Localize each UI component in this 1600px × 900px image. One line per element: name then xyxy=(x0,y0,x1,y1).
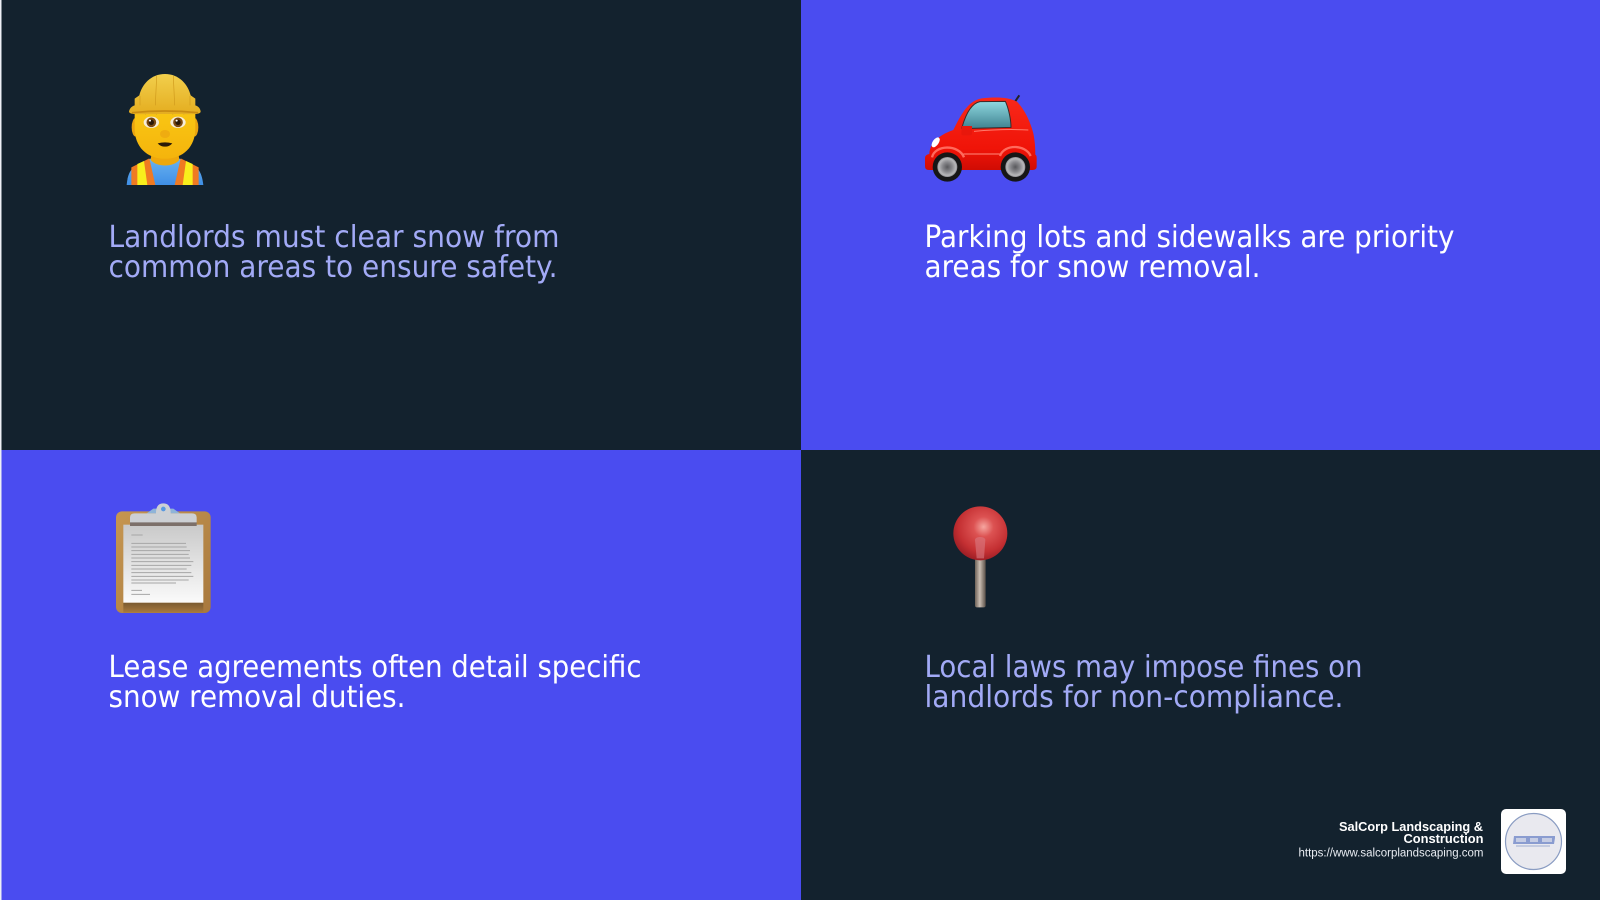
icon: clipboard xyxy=(116,503,211,613)
brand url: https://www.salcorplandscaping.com xyxy=(1298,848,1484,860)
logo xyxy=(1501,809,1566,874)
panel: local laws xyxy=(801,450,1600,900)
text: local laws: landlords for non-compliance. xyxy=(924,680,1344,715)
panel: lease agreements xyxy=(0,450,801,900)
brand name: SalCorp Landscaping & xyxy=(1339,819,1483,834)
left edge strip xyxy=(0,0,2,900)
text: parking lots: areas for snow removal. xyxy=(924,250,1260,285)
text: lease agreements: snow removal duties. xyxy=(108,680,406,715)
icon: construction worker xyxy=(127,74,203,185)
brand block xyxy=(1298,809,1566,874)
panel: common areas xyxy=(0,0,801,450)
panel: parking lots xyxy=(801,0,1600,450)
icon: car xyxy=(925,95,1037,182)
text: lease agreements: Lease agreements often detail specific xyxy=(108,650,642,685)
icon: round pushpin xyxy=(953,506,1007,607)
brand name: Construction xyxy=(1404,831,1484,846)
text: parking lots: Parking lots and sidewalks are priority xyxy=(924,220,1454,255)
text: common areas: Landlords must clear snow from xyxy=(108,220,560,255)
text: local laws: Local laws may impose fines on xyxy=(924,650,1362,685)
text: common areas: common areas to ensure safety. xyxy=(108,250,558,285)
